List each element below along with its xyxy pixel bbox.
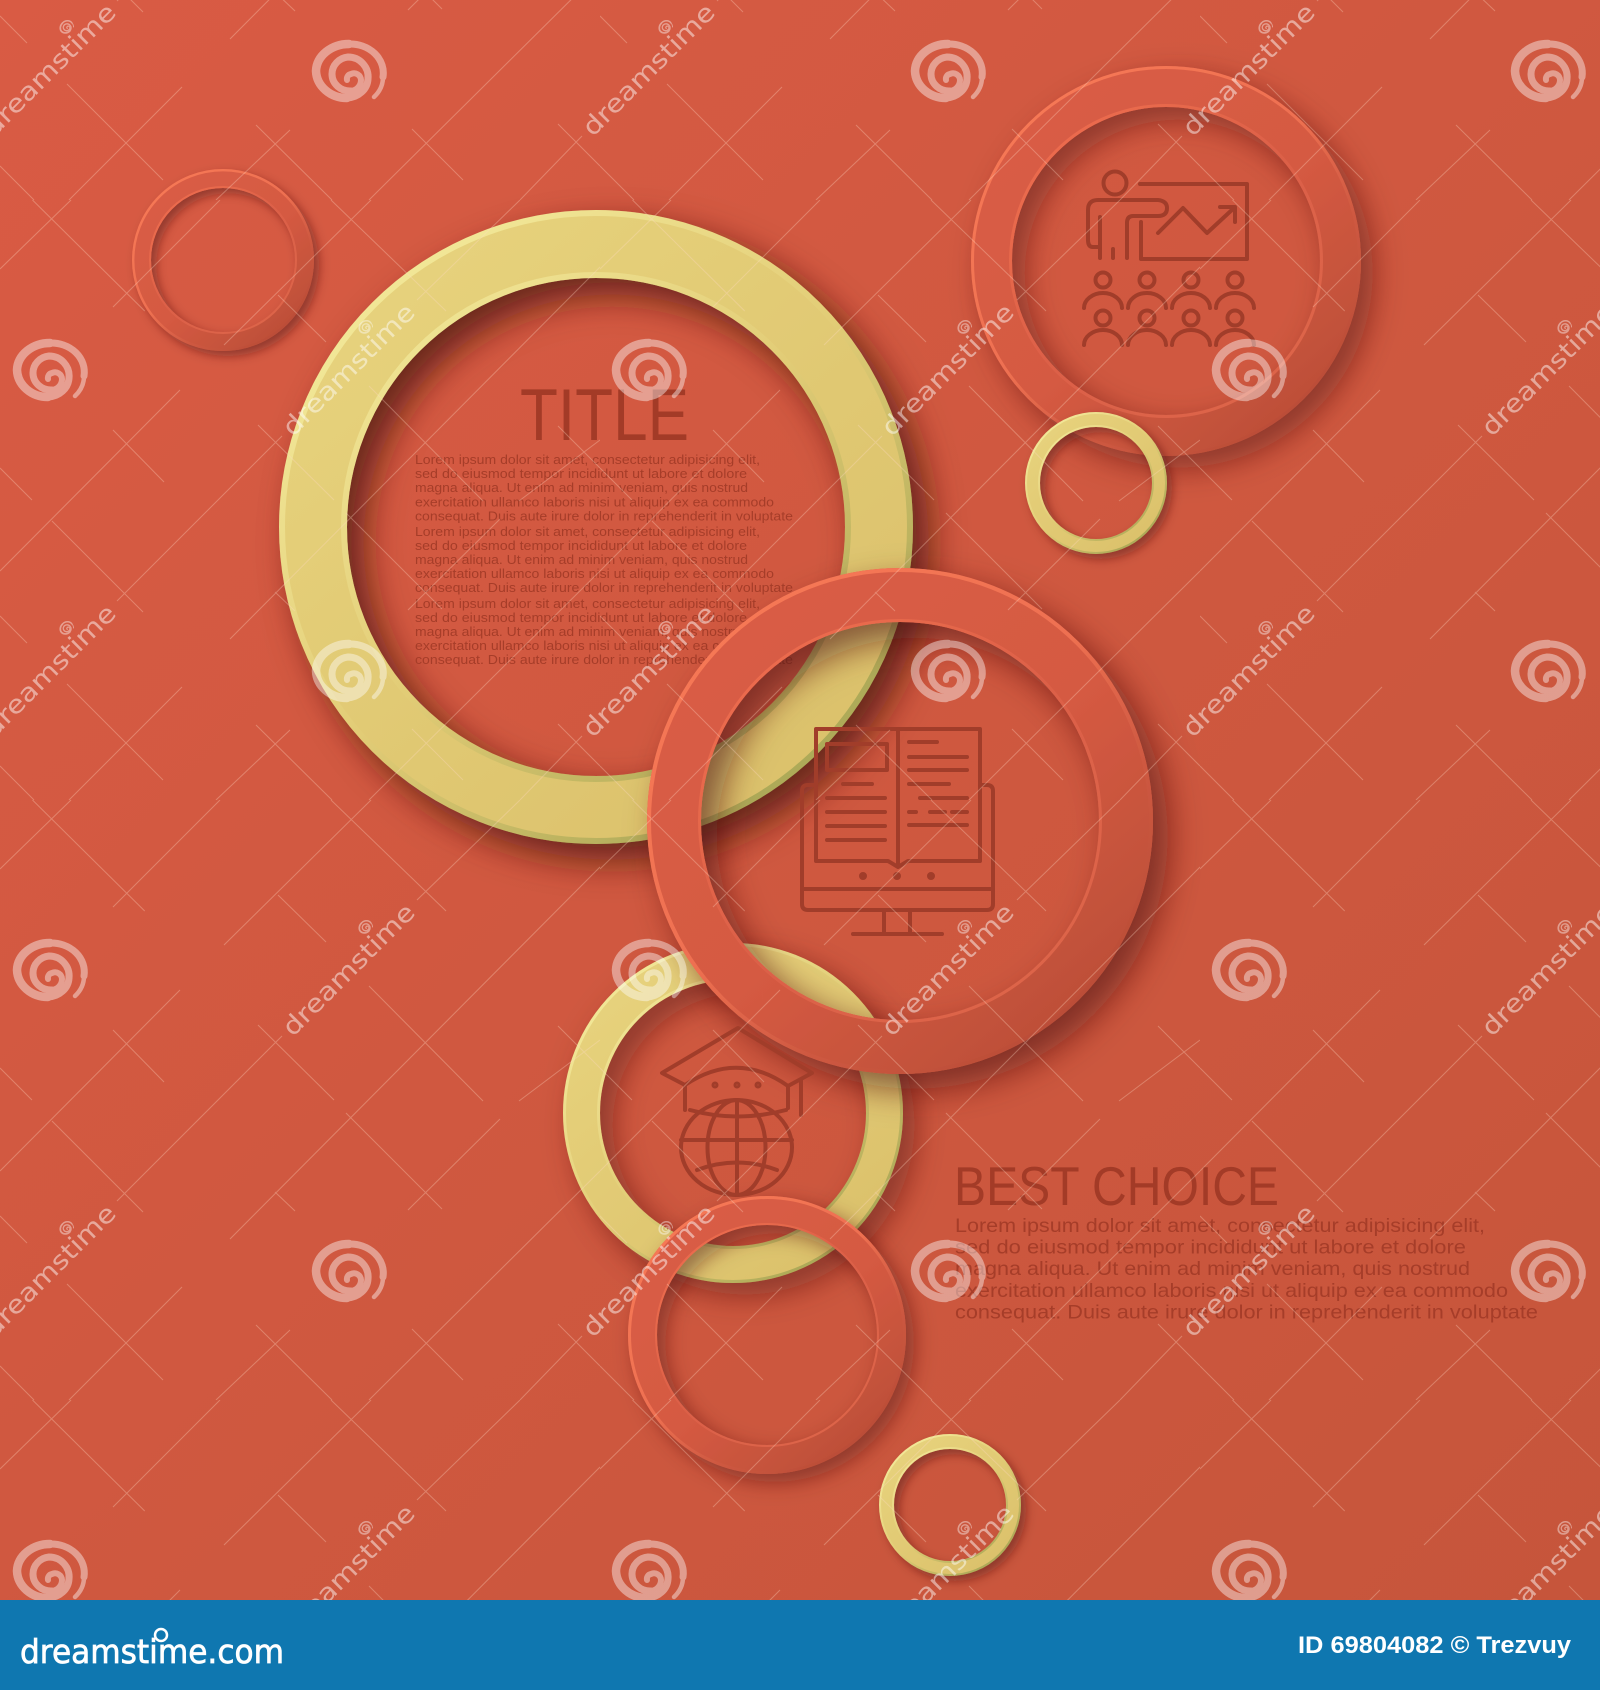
watermark: dreamstime diagonal text: dreamstime	[577, 1199, 721, 1343]
text block: best choice paragraph: sed do eiusmod tempor incididunt ut labore et dolore	[955, 1236, 1466, 1258]
watermark: dreamstime diagonal text: dreamstime	[1177, 0, 1321, 142]
text block: main paragraph: magna aliqua. Ut enim ad minim veniam, quis nostrud	[415, 552, 748, 567]
watermark: dreamstime diagonal text: dreamstime	[1177, 599, 1321, 743]
ring: lower yellow	[582, 962, 884, 1264]
text block: main paragraph: Lorem ipsum dolor sit amet, consectetur adipisicing elit,	[415, 596, 760, 611]
ring: small yellow top right	[1032, 420, 1160, 546]
text block: best choice paragraph: Lorem ipsum dolor sit amet, consectetur adipisicing elit,	[955, 1215, 1485, 1237]
text block: main paragraph: magna aliqua. Ut enim ad minim veniam, quis nostrud	[415, 624, 748, 639]
icon: graduation cap and globe	[662, 1028, 812, 1195]
text block: best choice paragraph: exercitation ullamco laboris nisi ut aliquip ex ea commodo	[955, 1280, 1508, 1302]
text block: main paragraph: sed do eiusmod tempor incididunt ut labore et dolore	[415, 610, 747, 625]
text block: best choice paragraph: magna aliqua. Ut enim ad minim veniam, quis nostrud	[955, 1258, 1470, 1280]
heading: best choice: BEST CHOICE	[954, 1155, 1279, 1217]
text block: best choice paragraph: consequat. Duis aute irure dolor in reprehenderit in voluptate	[955, 1302, 1538, 1324]
watermark: dreamstime diagonal text: dreamstime	[1476, 298, 1600, 442]
text block: main paragraph: exercitation ullamco laboris nisi ut aliquip ex ea commodo	[415, 638, 774, 653]
text block: main paragraph	[415, 452, 793, 667]
ring: middle red	[649, 570, 1151, 1072]
ring: lower red	[630, 1198, 904, 1472]
text block: main paragraph: sed do eiusmod tempor incididunt ut labore et dolore	[415, 538, 747, 553]
watermark: dreamstime diagonal text: dreamstime	[277, 1499, 421, 1643]
footer: site name: dreamstime.com	[20, 1632, 284, 1671]
icon: open book on monitor	[802, 729, 993, 934]
text block: main paragraph: consequat. Duis aute irure dolor in reprehenderit in voluptate	[415, 508, 793, 524]
text block: main paragraph: consequat. Duis aute irure dolor in reprehenderit in voluptate	[415, 652, 793, 667]
ring: small red top left	[133, 170, 313, 350]
watermark: dreamstime diagonal text: dreamstime	[1177, 1199, 1321, 1343]
watermark: dreamstime diagonal text: dreamstime	[277, 898, 421, 1042]
ring: small yellow bottom	[886, 1442, 1014, 1568]
watermark: dreamstime diagonal text: dreamstime	[876, 298, 1020, 442]
icon: presenter with audience	[1084, 172, 1254, 345]
footer: image id and author: ID 69804082 © Trezvuy	[1298, 1632, 1572, 1659]
watermark: dreamstime diagonal text: dreamstime	[1476, 898, 1600, 1042]
watermark: dreamstime diagonal text: dreamstime	[577, 599, 721, 743]
watermark: dreamstime diagonal text: dreamstime	[876, 1499, 1020, 1643]
watermark: dreamstime diagonal text: dreamstime	[277, 298, 421, 442]
text block: main paragraph: sed do eiusmod tempor incididunt ut labore et dolore	[415, 466, 747, 481]
text block: best choice paragraph	[955, 1215, 1538, 1324]
watermark: dreamstime diagonal text: dreamstime	[876, 898, 1020, 1042]
text block: main paragraph: consequat. Duis aute irure dolor in reprehenderit in voluptate	[415, 580, 793, 595]
title: TITLE	[520, 375, 689, 456]
footer bar	[0, 1600, 1600, 1690]
text block: main paragraph: Lorem ipsum dolor sit amet, consectetur adipisicing elit,	[415, 524, 760, 539]
ring: large yellow	[313, 244, 879, 810]
ring: top right red	[972, 68, 1360, 454]
footer: logo mark	[155, 1629, 167, 1641]
text block: main paragraph: exercitation ullamco laboris nisi ut aliquip ex ea commodo	[415, 494, 774, 510]
watermark: dreamstime diagonal text: dreamstime	[1476, 1499, 1600, 1643]
text block: main paragraph: exercitation ullamco laboris nisi ut aliquip ex ea commodo	[415, 566, 774, 581]
text block: main paragraph: Lorem ipsum dolor sit amet, consectetur adipisicing elit,	[415, 452, 760, 467]
text block: main paragraph: magna aliqua. Ut enim ad minim veniam, quis nostrud	[415, 480, 748, 495]
watermark: dreamstime diagonal text: dreamstime	[577, 0, 721, 142]
